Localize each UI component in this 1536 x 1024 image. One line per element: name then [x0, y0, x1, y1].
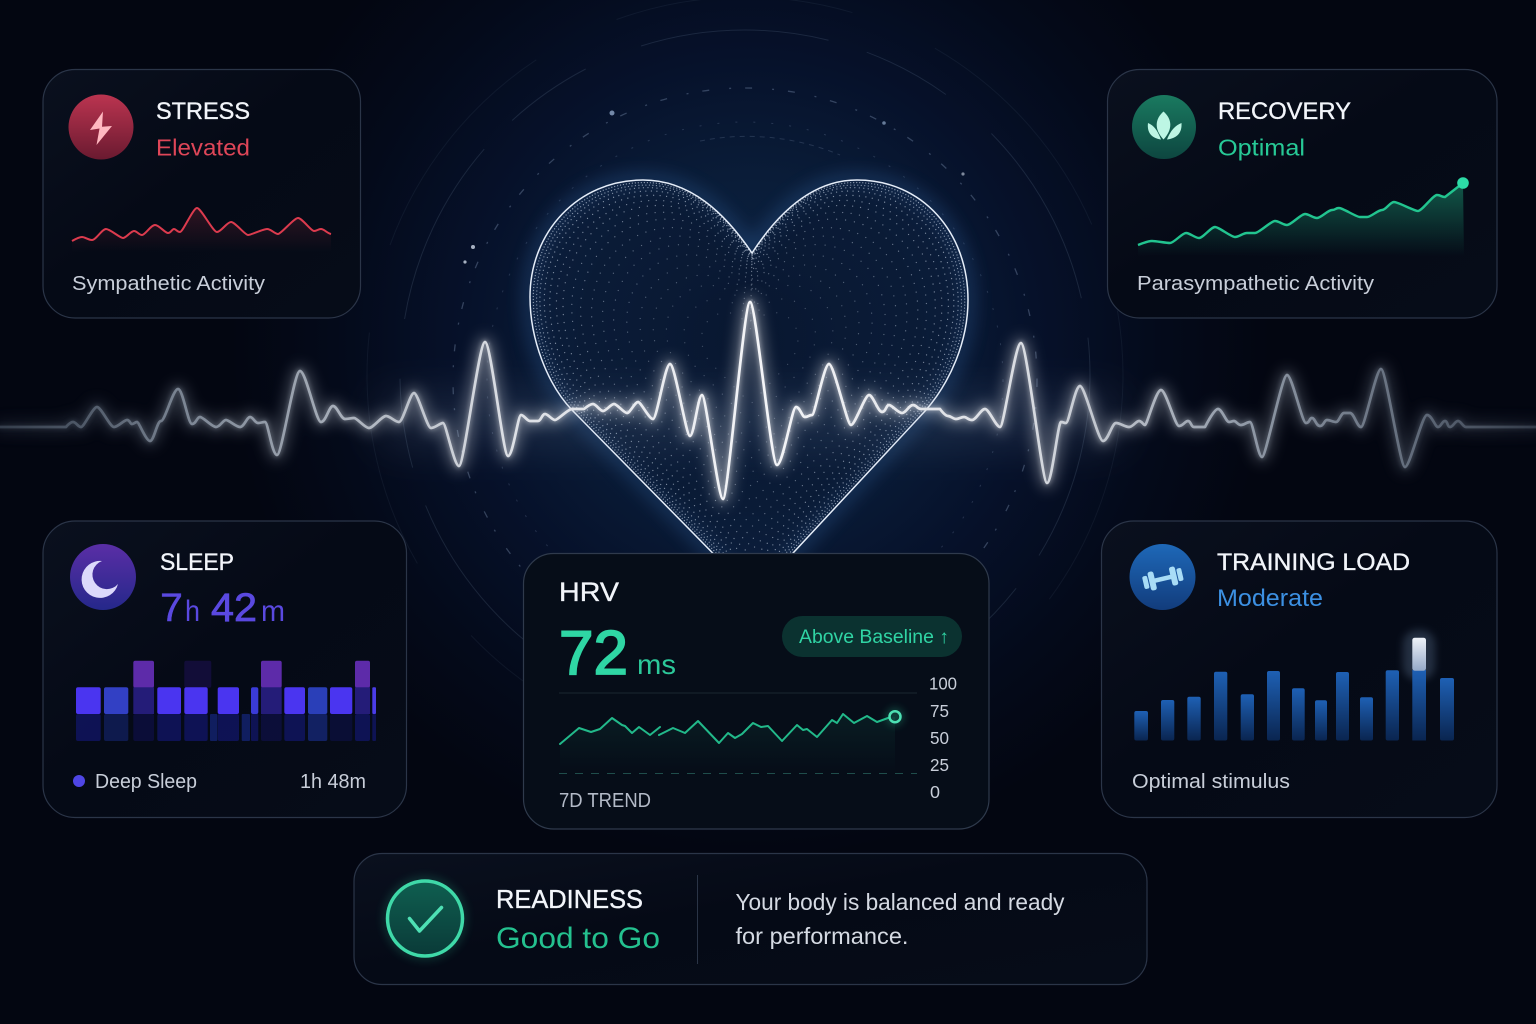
- heading: HRV: HRV: [559, 577, 619, 607]
- y axis labels: 50: [930, 728, 949, 748]
- value: sleep duration: 42: [211, 586, 257, 630]
- status: elevated: Elevated: [156, 134, 250, 160]
- status: optimal: Optimal: [1218, 134, 1305, 160]
- sparkline: sympathetic activity: [72, 208, 331, 252]
- line chart: 7 day trend: [559, 693, 917, 774]
- legend: deep sleep: Deep Sleep: [95, 771, 197, 793]
- bar chart: training load: [1134, 630, 1454, 740]
- heading: readiness: READINESS: [496, 886, 643, 914]
- badge: above baseline: Above Baseline ↑: [799, 627, 949, 648]
- ECG waveform: [0, 302, 1536, 499]
- value: sleep duration: [160, 586, 285, 630]
- chart: sleep stages: [76, 661, 376, 741]
- icon: lightning bolt: [68, 94, 134, 160]
- caption: parasympathetic activity: Parasympathetic Activity: [1137, 273, 1374, 295]
- status: moderate: Moderate: [1217, 585, 1323, 612]
- concentric rings: [367, 0, 1123, 753]
- legend: deep sleep: [73, 771, 366, 793]
- status: good to go: Good to Go: [496, 922, 660, 955]
- summary text: for performance.: [736, 923, 908, 949]
- panel: stress: [43, 70, 360, 318]
- y axis labels: 75: [930, 701, 949, 721]
- caption: sympathetic activity: Sympathetic Activity: [72, 273, 265, 295]
- y axis labels: 0: [930, 782, 940, 802]
- icon: moon: [70, 544, 136, 610]
- panel: training load: [1102, 521, 1497, 818]
- panel: recovery: [1108, 70, 1497, 318]
- icon: lotus: [1132, 95, 1196, 159]
- panel: HRV: [524, 554, 989, 829]
- value: 72 ms: ms: [637, 649, 676, 680]
- icon: dumbbell: [1130, 544, 1196, 610]
- value: sleep duration: h: [185, 595, 200, 628]
- summary text: Your body is balanced and ready: [736, 889, 1065, 915]
- value: sleep duration: 7: [160, 586, 183, 630]
- heading: training load: TRAINING LOAD: [1217, 549, 1410, 576]
- y axis labels: 100: [929, 674, 957, 694]
- heading: sleep: SLEEP: [160, 549, 234, 576]
- panel: sleep: [43, 521, 406, 818]
- heart: [530, 180, 968, 595]
- value: 72 ms: [559, 619, 676, 688]
- heading: stress: STRESS: [156, 98, 250, 125]
- y axis labels: [929, 674, 957, 802]
- caption: 7D trend: 7D TREND: [559, 790, 651, 812]
- value: 72 ms: 72: [559, 619, 628, 688]
- summary text: [736, 889, 1065, 949]
- panel: readiness: [354, 854, 1147, 984]
- value: sleep duration: m: [261, 595, 285, 628]
- heading: recovery: RECOVERY: [1218, 98, 1351, 125]
- badge: above baseline: [782, 616, 962, 657]
- area chart: parasympathetic activity: [1138, 177, 1469, 256]
- y axis labels: 25: [930, 755, 949, 775]
- legend: deep sleep: 1h 48m: [300, 771, 366, 793]
- caption: optimal stimulus: Optimal stimulus: [1132, 771, 1290, 793]
- icon: check: [382, 876, 468, 962]
